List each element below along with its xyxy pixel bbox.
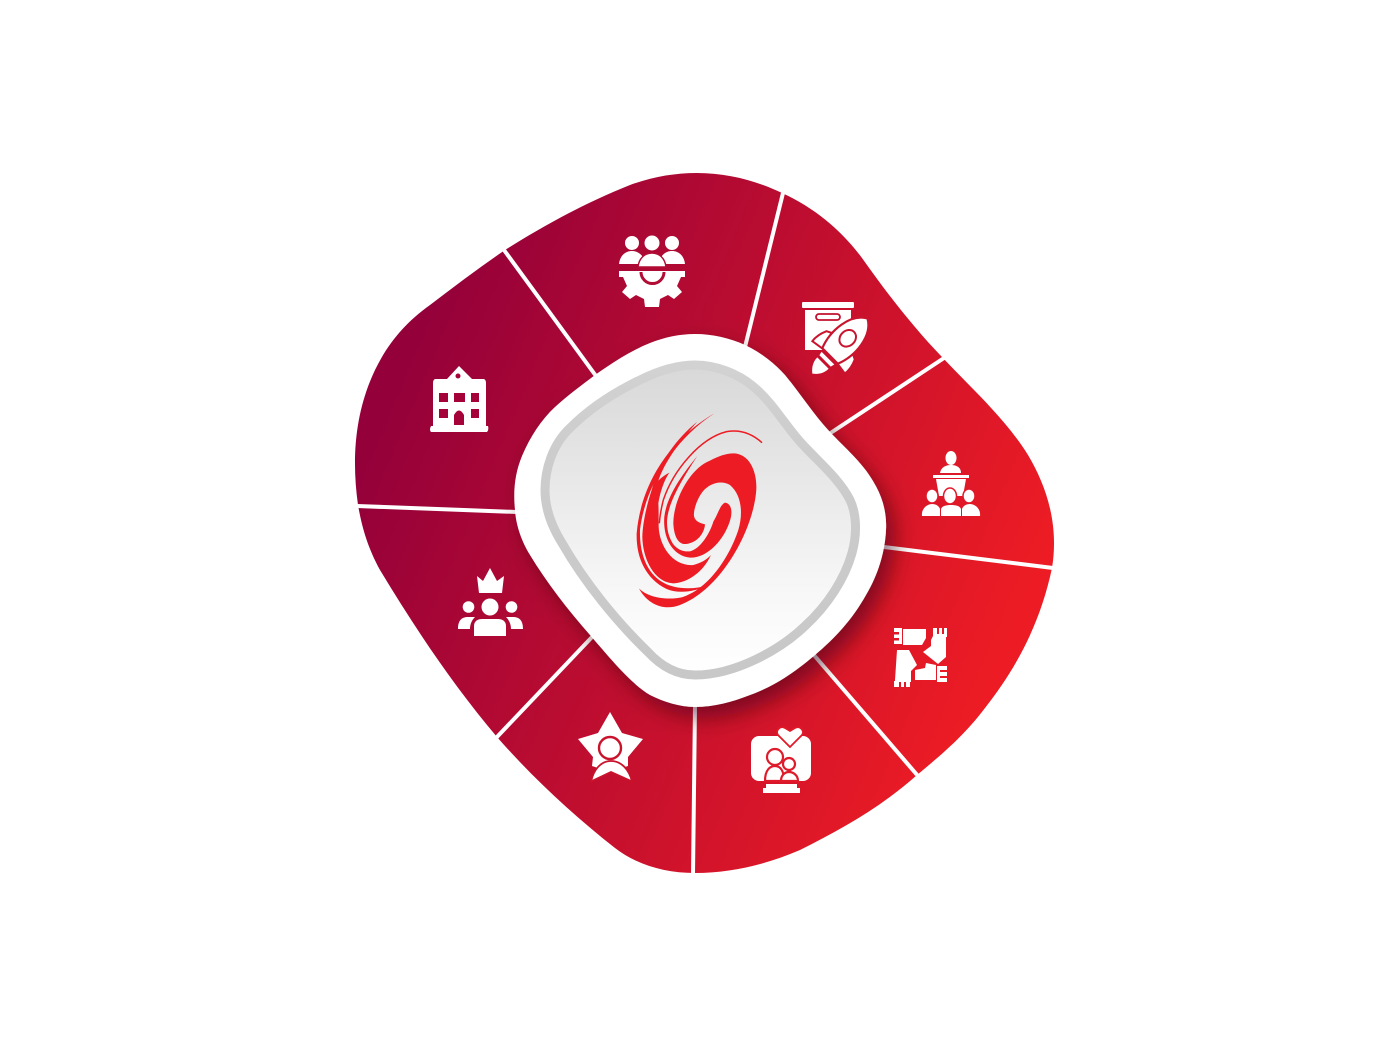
icon: speaker and audience [922, 451, 980, 516]
panel: central white badge [514, 334, 886, 707]
logo: red spiral [637, 413, 762, 607]
gray inner ring [545, 365, 856, 675]
icon: star with person [578, 712, 643, 782]
icon: building [430, 366, 488, 432]
icon: family on screen with heart [751, 727, 811, 793]
icon: box and rocket [796, 302, 884, 390]
panel: outer segmented wheel [355, 173, 1054, 875]
icon: team and gear [619, 236, 685, 307]
icon: four interlocked hands [894, 628, 947, 687]
icon: crown and people [458, 568, 523, 636]
